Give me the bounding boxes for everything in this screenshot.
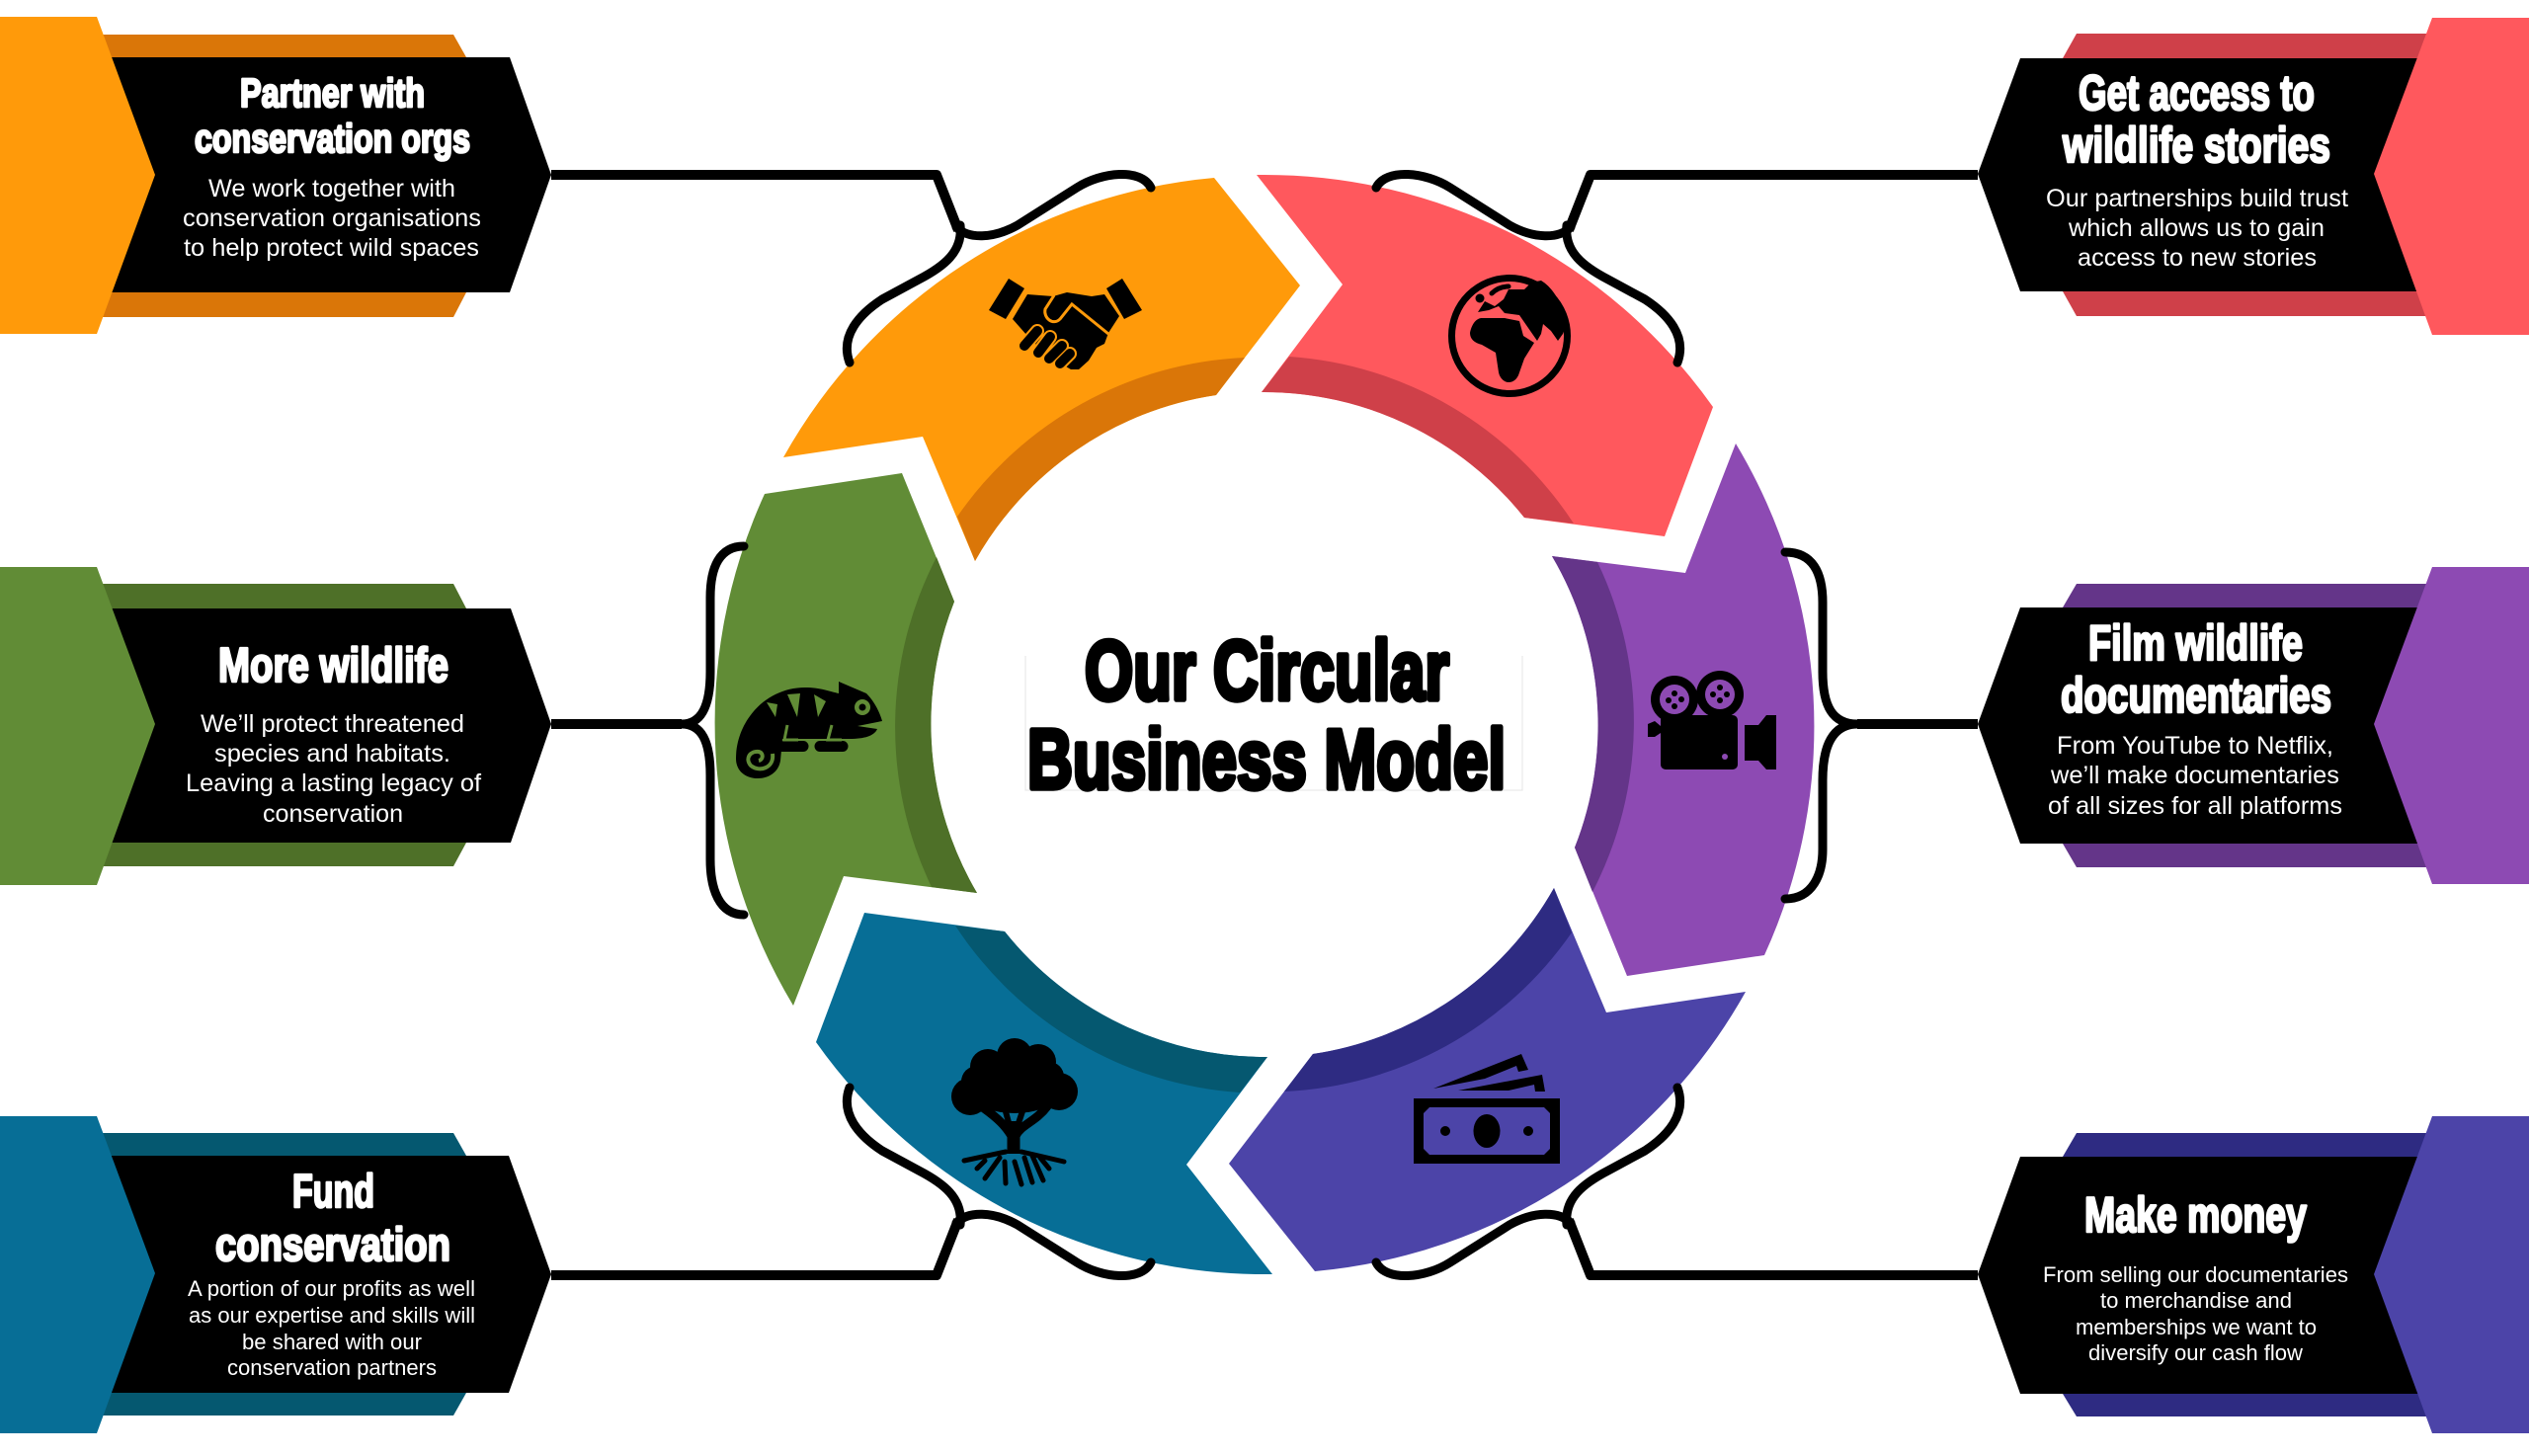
panel: Partner with conservation orgs xyxy=(0,17,551,334)
text: fund description: A portion of our profits as well xyxy=(188,1276,475,1301)
heading: Fund conservation xyxy=(215,1165,450,1270)
heading: Film wildlife documentaries xyxy=(2061,615,2331,723)
title: Our Circular Business Model: Our Circular xyxy=(1085,624,1449,718)
text: fund description: be shared with our xyxy=(242,1330,422,1354)
heading: More wildlife: More wildlife xyxy=(218,639,449,692)
wheel segment: red arrow xyxy=(1257,175,1713,536)
icon: banknotes xyxy=(1414,1054,1560,1164)
text: money description xyxy=(2043,1262,2348,1365)
text: fund description: conservation partners xyxy=(227,1355,437,1380)
text: documentaries description: From YouTube to Netflix, xyxy=(2057,732,2333,760)
text: money description: From selling our documentaries xyxy=(2043,1262,2348,1287)
text: partner description: We work together with xyxy=(208,175,455,202)
text: partner description: conservation organisations xyxy=(183,204,481,232)
text: partner description xyxy=(183,175,481,262)
text: fund description xyxy=(188,1276,475,1380)
panel: Fund conservation xyxy=(0,1116,551,1433)
panel: Film wildlife documentaries xyxy=(1978,567,2529,884)
connector: orange box to wheel xyxy=(551,174,1151,363)
heading: Partner with conservation orgs: Partner with xyxy=(240,70,425,116)
heading: Partner with conservation orgs: conservation orgs xyxy=(195,116,470,161)
connector: teal box to wheel xyxy=(551,1088,1151,1276)
text: money description: diversify our cash flow xyxy=(2088,1340,2303,1365)
text: wildlife description: We’ll protect threatened xyxy=(201,710,464,738)
heading: Get access to wildlife stories: Get access to xyxy=(2079,65,2315,121)
text: documentaries description xyxy=(2048,732,2342,820)
panel: Make money xyxy=(1978,1116,2529,1433)
panel: Get access to wildlife stories xyxy=(1978,18,2529,335)
text: stories description: access to new stories xyxy=(2078,244,2317,272)
heading: Fund conservation: conservation xyxy=(215,1218,450,1270)
icon: handshake xyxy=(989,279,1142,369)
connector: indigo box to wheel xyxy=(1376,1088,1978,1276)
heading: Partner with conservation orgs xyxy=(195,70,470,161)
heading: Fund conservation: Fund xyxy=(292,1165,374,1217)
text: stories description: Our partnerships build trust xyxy=(2046,185,2348,212)
heading: Make money: Make money xyxy=(2084,1187,2307,1243)
text: wildlife description xyxy=(186,710,482,828)
text: wildlife description: species and habitats. xyxy=(214,740,450,768)
wheel segment: orange arrow xyxy=(783,178,1300,561)
text: stories description: which allows us to gain xyxy=(2068,214,2325,242)
icon: globe xyxy=(1452,279,1567,393)
text: wildlife description: conservation xyxy=(263,800,403,828)
heading: Film wildlife documentaries: documentaries xyxy=(2061,668,2331,723)
connector: green box to wheel xyxy=(551,546,744,915)
text: fund description: as our expertise and skills will xyxy=(189,1303,475,1328)
text: money description: to merchandise and xyxy=(2100,1288,2292,1313)
connector: purple box to wheel xyxy=(1785,552,1978,899)
icon: film camera xyxy=(1648,671,1776,769)
wheel segment: indigo arrow xyxy=(1229,888,1746,1271)
wheel segment: green arrow xyxy=(715,473,977,1006)
title: Our Circular Business Model xyxy=(1027,624,1506,807)
heading: Film wildlife documentaries: Film wildlife xyxy=(2088,615,2303,671)
text: money description: memberships we want to xyxy=(2076,1315,2317,1339)
title: Our Circular Business Model: Business Model xyxy=(1027,713,1506,807)
wheel segment: purple arrow xyxy=(1552,444,1814,976)
title box outline xyxy=(1025,656,1522,790)
heading: Get access to wildlife stories: wildlife stories xyxy=(2062,118,2330,173)
text: documentaries description: of all sizes for all platforms xyxy=(2048,792,2342,820)
text: documentaries description: we’ll make documentaries xyxy=(2050,762,2339,789)
icon: tree with roots xyxy=(951,1038,1078,1184)
text: stories description xyxy=(2046,185,2348,272)
text: partner description: to help protect wild spaces xyxy=(184,234,479,262)
wheel segment: teal arrow xyxy=(816,913,1272,1274)
connector: red box to wheel xyxy=(1376,174,1978,363)
text: wildlife description: Leaving a lasting legacy of xyxy=(186,769,482,797)
panel: More wildlife xyxy=(0,567,551,885)
icon: chameleon xyxy=(736,682,882,778)
heading: Get access to wildlife stories xyxy=(2062,65,2330,173)
